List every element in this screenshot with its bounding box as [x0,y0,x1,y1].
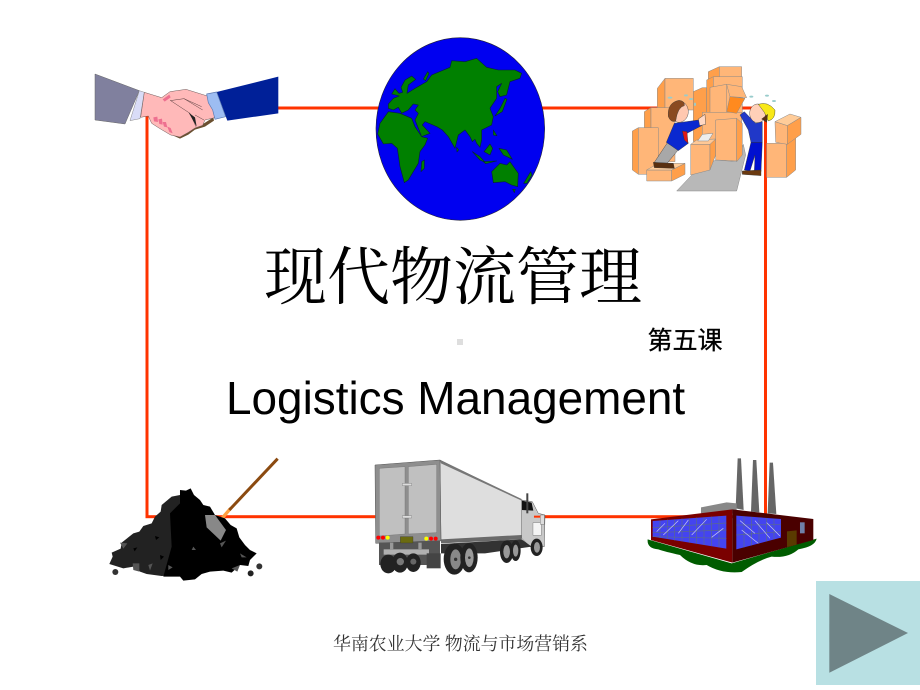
title: chinese: 现代物流管理 [264,243,642,313]
madagascar [421,160,424,172]
trailer rear [375,460,441,543]
ocean [376,38,545,220]
tasmania [513,189,515,193]
right cuff [207,92,226,119]
floor box [647,170,672,181]
front box [716,118,737,161]
back centre stack [693,88,707,142]
man in suit [653,100,706,168]
africa [378,112,428,183]
icon: articulated truck [375,460,545,575]
trailer side [440,460,522,542]
conveyor [677,144,746,191]
novaya zemlya [423,72,429,81]
next-slide navigation button [816,581,920,685]
tail lights [376,536,380,540]
wheels [380,539,543,575]
pink nails [153,95,173,133]
door [787,530,797,547]
icon: warehouse workers and boxes [632,67,801,191]
icon: handshake [95,74,278,139]
lawn [648,539,817,572]
right wall [732,509,813,563]
shovel blade [205,515,226,541]
roof block [701,502,737,513]
title: english: Logistics Management [226,372,685,424]
falling box [727,84,747,98]
red connecting frame [147,108,766,517]
borneo [484,144,493,155]
red line seen through cab window [534,514,540,520]
icon: globe [376,38,545,220]
sweat drops [668,94,776,106]
pile, lit side [109,495,180,576]
lesson label: 第五课 [648,327,723,355]
back left box [657,78,665,108]
right windows [736,516,781,549]
japan [495,98,507,116]
left sleeve [95,74,139,124]
play arrow [829,594,908,673]
small side window [800,522,805,533]
sumatra and java [472,152,486,163]
lower left box [632,128,638,174]
middle left box [644,108,651,132]
licence plate [400,537,413,543]
left wall [651,509,732,563]
australia [492,162,518,187]
shadow under hands [173,117,214,139]
button background [816,581,920,685]
man in hard hat [740,103,775,176]
left windows [653,516,726,549]
finger lines [170,99,204,127]
philippines [493,130,497,136]
small centre marker [457,339,463,345]
coal lumps [112,569,118,575]
new zealand [524,172,532,183]
footer text: 华南农业大学 物流与市场营销系 [333,633,588,654]
clasped hands [141,89,216,137]
shovel handle [220,508,231,521]
sri lanka [457,147,459,152]
right box stack [767,143,787,177]
pile, dark side [163,488,257,581]
tractor cab [522,500,545,547]
eurasia [388,58,522,148]
left cuff [130,91,144,121]
desk box with papers [691,144,710,175]
chassis [379,541,440,565]
icon: coal pile with shovel [109,459,278,581]
new guinea [499,148,512,159]
coal facets [120,536,247,572]
icon: factory [648,458,817,572]
right sleeve [217,77,278,121]
chimneys [736,458,744,510]
